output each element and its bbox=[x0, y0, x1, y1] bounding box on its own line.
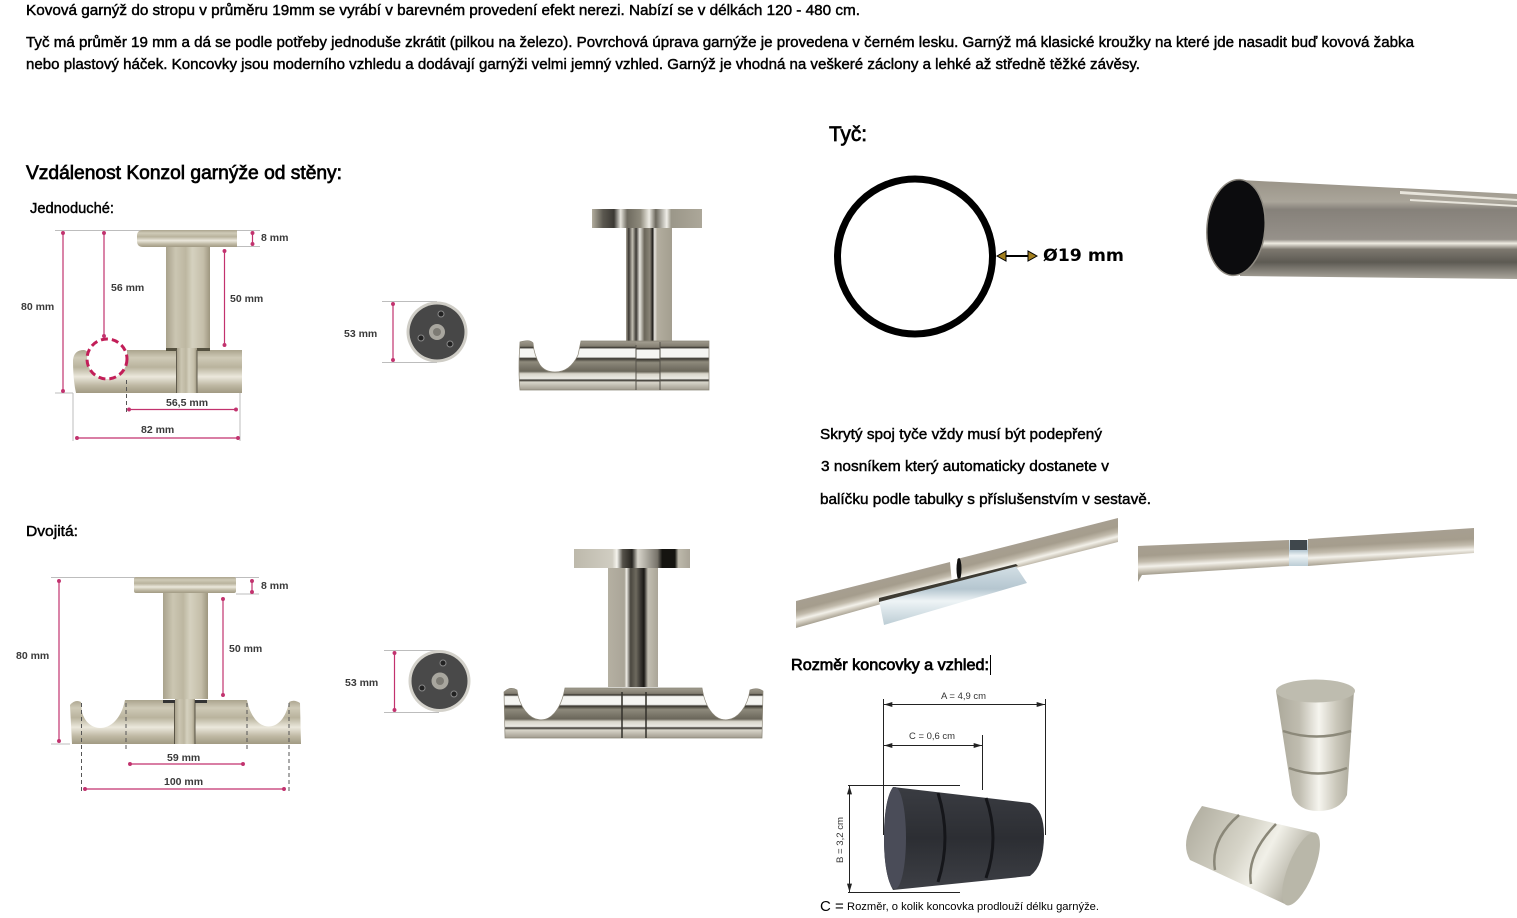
text: hidden joint note bbox=[820, 426, 1151, 508]
photo: upright silver end cap bbox=[1276, 680, 1355, 811]
diagram: double rosette 53 mm bbox=[345, 650, 470, 712]
diagram: single rosette 53 mm bbox=[344, 302, 468, 362]
diagram: double bracket dimensions: 80 mm bbox=[16, 650, 49, 662]
diagram: single bracket dimensions: 8 mm bbox=[261, 232, 288, 244]
caption: end cap: Rozměr, o kolik koncovka prodlouží délku garnýže. bbox=[847, 901, 1099, 913]
photo: chrome double bracket bbox=[504, 549, 763, 738]
diagram: single bracket dimensions: 56 mm bbox=[111, 282, 144, 294]
diagram: single bracket dimensions: 80 mm bbox=[21, 301, 54, 313]
photo: lying silver end cap bbox=[1186, 806, 1328, 910]
diagram: double bracket dimensions: 8 mm bbox=[261, 580, 288, 592]
diagram: double bracket dimensions: 59 mm bbox=[167, 752, 200, 764]
diagram: single rosette 53 mm: 53 mm bbox=[344, 328, 377, 340]
photo: open rod joint bbox=[796, 518, 1118, 628]
caption: end cap bbox=[820, 898, 1099, 915]
heading: end cap: Rozměr koncovky a vzhled: bbox=[791, 657, 989, 674]
diagram: end cap dimensions: A = 4,9 cm bbox=[941, 691, 986, 702]
heading: double: Dvojitá: bbox=[26, 523, 78, 540]
black cap shape bbox=[884, 787, 1044, 890]
diagram: double bracket dimensions bbox=[16, 577, 301, 792]
heading: rod: Tyč: bbox=[829, 123, 867, 146]
heading: bracket distance: Vzdálenost Konzol garnýže od stěny: bbox=[26, 163, 342, 184]
caption: end cap: C = bbox=[820, 898, 844, 915]
intro text bbox=[26, 2, 1415, 73]
text: hidden joint note: 3 nosníkem který automaticky dostanete v bbox=[821, 458, 1110, 475]
diagram: single bracket dimensions: 50 mm bbox=[230, 293, 263, 305]
intro text: nebo plastový háček. Koncovky jsou moderního vzhledu a dodávají garnýži velmi jemný vzhled. Garnýž je vhodná na veškeré záclony a lehké až středně těžké závěsy. bbox=[26, 56, 1140, 73]
arrow: diameter bbox=[997, 251, 1037, 261]
diagram: end cap dimensions: C = 0,6 cm bbox=[909, 731, 955, 742]
rod position circle bbox=[87, 339, 127, 379]
label: diameter: Ø19 mm bbox=[1043, 246, 1124, 266]
diagram: single bracket dimensions: 82 mm bbox=[141, 424, 174, 436]
photo: rod tube bbox=[1203, 177, 1517, 279]
text: hidden joint note: balíčku podle tabulky s příslušenstvím v sestavě. bbox=[820, 491, 1151, 508]
photo: chrome single bracket bbox=[519, 209, 709, 390]
intro text: Kovová garnýž do stropu v průměru 19mm se vyrábí v barevném provedení efekt nerezi. Nabízí se v délkách 120 - 480 cm. bbox=[26, 2, 860, 19]
diagram: double bracket dimensions: 100 mm bbox=[164, 776, 203, 788]
diagram: end cap dimensions bbox=[835, 691, 1046, 892]
diagram: single bracket dimensions bbox=[21, 230, 288, 441]
photo: closed rod joint bbox=[1138, 528, 1474, 582]
diagram: double bracket dimensions: 50 mm bbox=[229, 643, 262, 655]
text: hidden joint note: Skrytý spoj tyče vždy musí být podepřený bbox=[820, 426, 1103, 443]
diagram: double rosette 53 mm: 53 mm bbox=[345, 677, 378, 689]
intro text: Tyč má průměr 19 mm a dá se podle potřeby jednoduše zkrátit (pilkou na železo). Povrchová úprava garnýže je provedena v černém lesku. Garnýž má klasické kroužky na které jde nasadit buď kovová žabka bbox=[26, 34, 1415, 51]
diagram: end cap dimensions: B = 3,2 cm bbox=[835, 817, 846, 863]
heading: single: Jednoduché: bbox=[30, 200, 114, 217]
diagram: single bracket dimensions: 56,5 mm bbox=[166, 397, 208, 409]
icon: rod cross-section ring bbox=[838, 179, 992, 334]
